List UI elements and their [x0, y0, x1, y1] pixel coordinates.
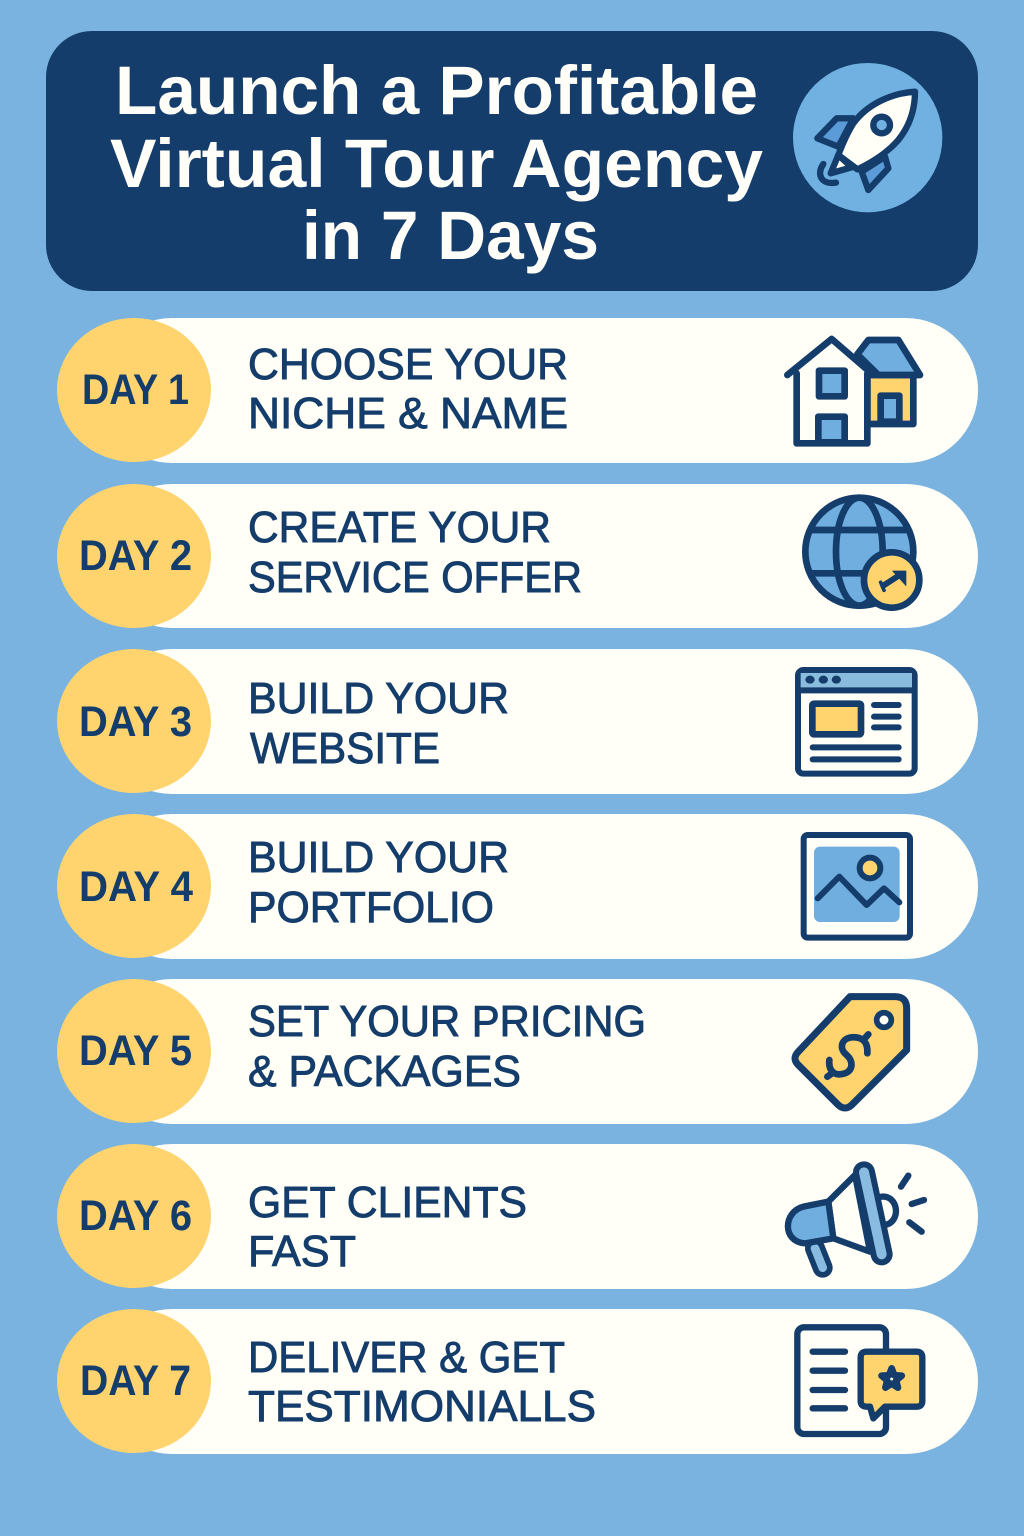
text: build your portfolio: BUILD YOUR [248, 833, 509, 882]
row: day 7 [57, 1309, 978, 1454]
pill: day 6 [100, 1144, 978, 1289]
badge: day 5 [57, 979, 211, 1123]
text: choose your niche and name [248, 340, 568, 438]
icon: price tag [795, 997, 907, 1108]
icon: website window [798, 670, 915, 774]
badge: day 4: DAY 4 [79, 863, 193, 911]
text: set your pricing and packages [248, 997, 646, 1096]
icon: houses [787, 339, 920, 443]
badge: day 7 [57, 1309, 211, 1453]
text: create your service offer [248, 503, 582, 602]
badge: day 5: DAY 5 [79, 1027, 192, 1075]
pill: day 4 [100, 814, 978, 959]
badge: day 1: DAY 1 [82, 366, 189, 414]
pill: day 1 [100, 318, 978, 463]
badge: day 6: DAY 6 [79, 1192, 192, 1240]
text: build your website [248, 674, 509, 773]
row: day 1 [57, 318, 978, 463]
text: build your portfolio [248, 833, 509, 932]
icon: rocket [793, 63, 942, 212]
row: day 5 [57, 979, 978, 1124]
text: set your pricing and packages: SET YOUR PRICING [248, 997, 646, 1046]
title: Virtual Tour Agency [110, 125, 763, 202]
badge: day 4 [57, 814, 211, 958]
text: get clients fast [248, 1178, 527, 1276]
text: create your service offer: CREATE YOUR [248, 503, 551, 552]
header panel [46, 31, 978, 291]
row: day 3 [57, 649, 978, 794]
text: get clients fast: FAST [248, 1227, 356, 1276]
badge: day 3 [57, 649, 211, 793]
icon: framed picture [804, 835, 910, 938]
text: create your service offer: SERVICE OFFER [248, 553, 582, 602]
pill: day 2 [100, 484, 978, 628]
text: choose your niche and name: CHOOSE YOUR [248, 340, 568, 389]
badge: day 7: DAY 7 [80, 1357, 191, 1405]
badge: day 6 [57, 1144, 211, 1288]
badge: day 2 [57, 484, 211, 628]
icon: globe with growth arrow [805, 498, 919, 608]
text: deliver and get testimonialls: TESTIMONIALLS [248, 1382, 596, 1431]
pill: day 5 [100, 979, 978, 1124]
text: build your website: BUILD YOUR [248, 674, 509, 723]
icon: megaphone [788, 1172, 924, 1268]
text: build your website: WEBSITE [250, 724, 440, 773]
title [110, 52, 763, 274]
text: set your pricing and packages: & PACKAGES [248, 1047, 521, 1096]
text: deliver and get testimonialls: DELIVER & GET [248, 1333, 565, 1382]
text: choose your niche and name: NICHE & NAME [248, 389, 568, 438]
badge: day 1 [57, 318, 211, 462]
badge: day 3: DAY 3 [79, 698, 192, 746]
icon: document with review bubble [797, 1327, 922, 1434]
text: build your portfolio: PORTFOLIO [248, 883, 494, 932]
text: deliver and get testimonialls [248, 1333, 596, 1431]
title: Launch a Profitable [115, 52, 758, 129]
title: in 7 Days [302, 197, 599, 274]
text: get clients fast: GET CLIENTS [248, 1178, 527, 1227]
row: day 2 [57, 484, 978, 628]
pill: day 7 [100, 1309, 978, 1454]
badge: day 2: DAY 2 [79, 532, 192, 580]
pill: day 3 [100, 649, 978, 794]
row: day 6 [57, 1144, 978, 1289]
row: day 4 [57, 814, 978, 959]
